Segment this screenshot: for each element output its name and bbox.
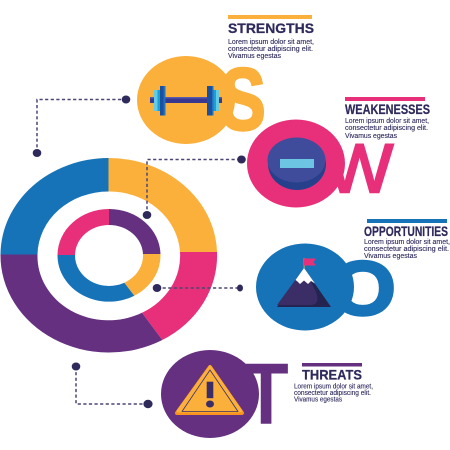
outer donut chart: [0, 158, 217, 353]
circle: opportunities: [256, 244, 354, 330]
icon: warning sign: [177, 367, 242, 413]
section: opportunities text: [364, 219, 450, 260]
section: opportunities text: consectetur adipiscing elit.: [364, 246, 449, 253]
section: opportunities text: Lorem ipsum dolor sit amet,: [364, 239, 450, 246]
section: strengths text: Vivamus egestas: [228, 53, 281, 60]
section: strengths text: Lorem ipsum dolor sit amet,: [228, 39, 314, 46]
circle: threats: [161, 350, 259, 438]
section: threats text: THREATS: [302, 366, 362, 382]
connector: strengths: [33, 96, 130, 157]
section: weaknesses text: Lorem ipsum dolor sit amet,: [345, 118, 429, 125]
letter W: W: [326, 130, 393, 207]
letter T: T: [244, 346, 289, 443]
letter S: S: [220, 50, 266, 148]
connector: opportunities: [153, 284, 243, 292]
section: weaknesses text: consectetur adipiscing elit.: [345, 125, 428, 132]
connector: weaknesses: [143, 156, 246, 219]
circle: weaknesses: [247, 120, 345, 208]
inner donut chart: [57, 209, 161, 302]
section: weaknesses text: [345, 97, 430, 140]
section: threats text: [294, 363, 373, 404]
section: threats text: consectetur adipiscing elit.: [294, 390, 371, 397]
section: strengths text: STRENGTHS: [228, 20, 314, 36]
section: strengths text: [228, 15, 314, 60]
circle: strengths: [137, 56, 235, 144]
section: strengths text: consectetur adipiscing elit.: [228, 46, 313, 53]
section: threats text: Lorem ipsum dolor sit amet,: [294, 384, 373, 390]
icon: mountain with flag: [277, 258, 331, 307]
letter O: O: [332, 249, 394, 329]
section: threats text: Vivamus egestas: [294, 396, 342, 404]
icon: minus badge: [268, 138, 326, 190]
section: weaknesses text: Vivamus egestas: [345, 133, 397, 140]
section: opportunities text: Vivamus egestas: [364, 253, 417, 260]
connector: threats: [72, 362, 153, 408]
icon: barbell: [150, 86, 222, 116]
